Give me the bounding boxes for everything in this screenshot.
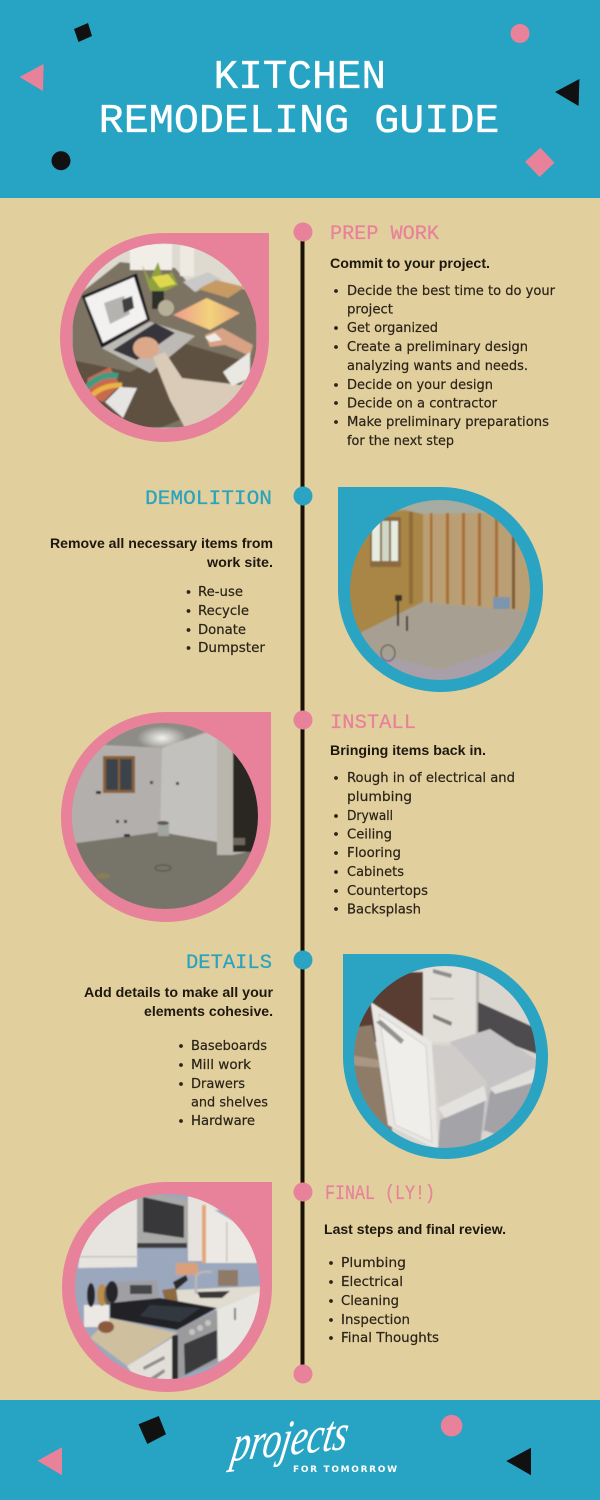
list: install: Ceiling (347, 828, 392, 842)
list: prep work: Create a preliminary design (347, 340, 528, 355)
subheading: details: elements cohesive. (144, 1003, 273, 1019)
timeline dot: install (294, 710, 312, 730)
list: final: Final Thoughts (341, 1331, 439, 1346)
list: demolition: Donate (198, 623, 246, 638)
list: final: Plumbing (341, 1256, 406, 1271)
heading: final: FINAL (LY!) (325, 1183, 435, 1206)
logo: projects (226, 1405, 353, 1473)
panel: install photo (61, 712, 271, 922)
list: install: Flooring (347, 846, 401, 861)
panel: details photo (343, 954, 548, 1159)
panel: prep work photo (60, 233, 269, 442)
icon: pink diamond (525, 148, 554, 177)
list: install (334, 771, 515, 918)
heading: demolition: DEMOLITION (145, 488, 272, 511)
timeline dot: final (294, 1182, 312, 1202)
list: prep work: Make preliminary preparations (347, 415, 549, 430)
subheading: details (84, 984, 274, 1019)
text: install (330, 712, 515, 918)
timeline dot: end (294, 1364, 312, 1384)
timeline dot: prep work (294, 222, 312, 242)
list: details: and shelves (191, 1096, 268, 1110)
list: prep work: Decide on a contractor (347, 396, 498, 412)
list: prep work: for the next step (347, 434, 454, 449)
list: prep work: Decide on your design (347, 378, 493, 393)
timeline dot: demolition (294, 486, 312, 506)
icon: pink triangle (20, 64, 44, 91)
icon: pink circle (441, 1415, 462, 1436)
heading: details: DETAILS (186, 952, 272, 975)
list: prep work: Get organized (347, 321, 438, 336)
icon: black square (74, 23, 92, 42)
icon: pink triangle (38, 1447, 62, 1475)
list: details: Baseboards (191, 1039, 267, 1054)
timeline dot: details (294, 950, 312, 970)
panel: final photo (62, 1182, 272, 1392)
list: final: Inspection (341, 1313, 410, 1328)
list: install: Countertops (347, 884, 428, 899)
subheading: final: Last steps and final review. (324, 1221, 506, 1237)
list: final (329, 1256, 439, 1346)
list: demolition: Recycle (198, 604, 249, 619)
subheading: details: Add details to make all your (84, 984, 274, 1000)
text: final (324, 1183, 506, 1346)
subheading: demolition: Remove all necessary items from (50, 535, 273, 551)
timeline (294, 222, 312, 1384)
header banner (0, 0, 600, 198)
list: install: Rough in of electrical and (347, 771, 515, 786)
list: prep work: analyzing wants and needs. (347, 359, 528, 374)
subheading: demolition: work site. (206, 554, 273, 570)
title: REMODELING GUIDE (99, 99, 499, 145)
text: prep work (330, 223, 556, 449)
list: details: Hardware (191, 1114, 255, 1129)
list: final: Electrical (341, 1275, 403, 1290)
subheading: prep work: Commit to your project. (330, 255, 490, 271)
icon: black square (138, 1416, 166, 1444)
icon: black triangle (506, 1448, 531, 1475)
list: final: Cleaning (341, 1294, 399, 1309)
list: demolition: Dumpster (198, 641, 266, 656)
panel: demolition photo (338, 487, 543, 692)
text: demolition (50, 488, 273, 656)
list: details: Mill work (191, 1058, 251, 1073)
title (99, 55, 499, 145)
list: prep work (334, 284, 556, 449)
list: prep work: project (347, 302, 393, 318)
list: demolition (187, 585, 266, 656)
list: demolition: Re-use (198, 585, 243, 600)
list: install: plumbing (347, 790, 412, 805)
logo: FOR TOMORROW (293, 1465, 397, 1475)
footer banner (0, 1400, 600, 1500)
list: prep work: Decide the best time to do your (347, 284, 556, 299)
list: install: Drywall (347, 809, 393, 824)
list: details: Drawers (191, 1077, 245, 1092)
icon: black circle (52, 151, 70, 170)
icon: pink circle (510, 24, 530, 43)
title: KITCHEN (214, 55, 386, 101)
subheading: demolition (50, 535, 273, 570)
heading: install: INSTALL (330, 712, 416, 735)
heading: prep work: PREP WORK (330, 223, 439, 246)
text: details (84, 952, 274, 1129)
list: install: Cabinets (347, 865, 404, 880)
subheading: install: Bringing items back in. (330, 742, 486, 758)
list: details (179, 1039, 268, 1129)
icon: black triangle (555, 79, 579, 106)
list: install: Backsplash (347, 902, 421, 918)
